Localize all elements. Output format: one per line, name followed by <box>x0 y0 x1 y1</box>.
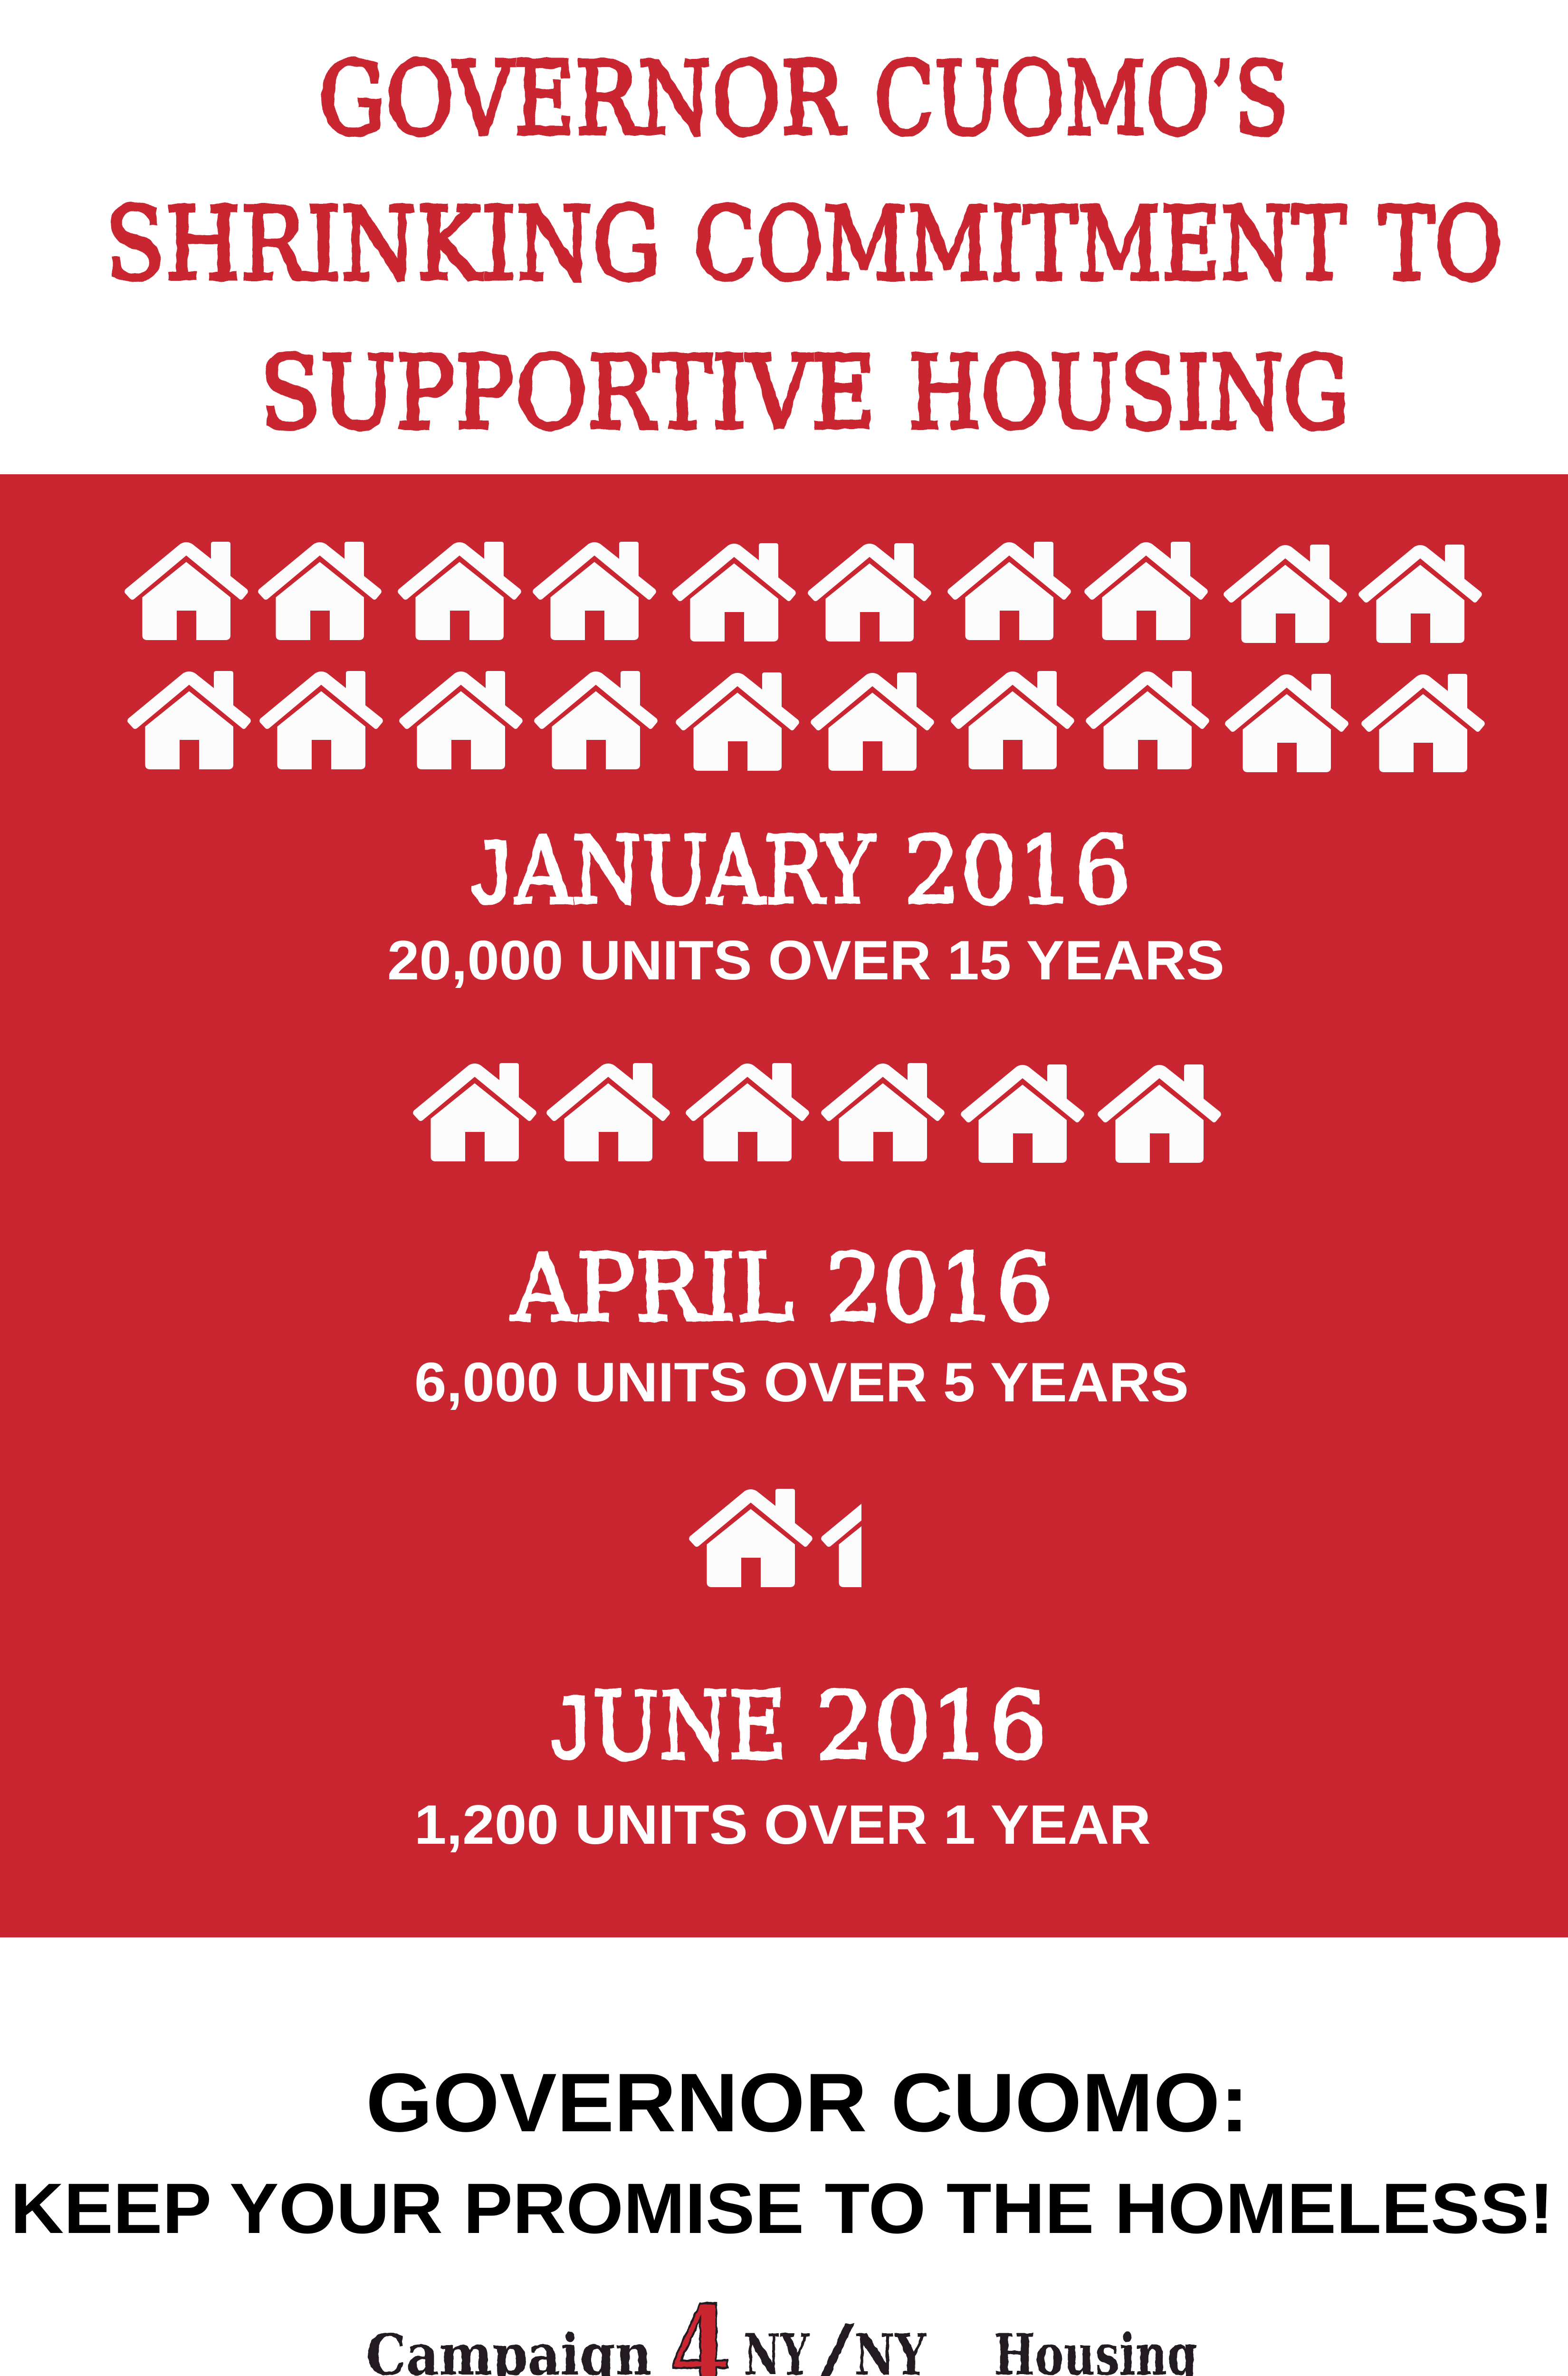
heading: June 2016: JUNE <box>545 1672 786 1786</box>
heading: January 2016: 2016 <box>904 817 1131 925</box>
heading: April 2016: APRIL <box>511 1234 794 1342</box>
logo: Campaign 4 NY/NY Housing <box>366 2280 1197 2376</box>
icon: house <box>689 1489 813 1587</box>
heading: April 2016 <box>511 1234 1053 1342</box>
icon: house <box>546 1063 670 1161</box>
icon: house <box>961 1064 1084 1163</box>
icon: house <box>808 543 931 642</box>
icon: partial house <box>821 1504 861 1587</box>
heading: Governor Cuomo call to action: GOVERNOR CUOMO: <box>366 2057 1249 2149</box>
panel: red timeline background <box>0 474 1568 1937</box>
text: keep your promise: KEEP YOUR PROMISE TO THE HOMELESS! <box>10 2168 1554 2248</box>
icon: house <box>1361 674 1485 772</box>
title: GOVERNOR <box>318 40 846 157</box>
icon: house <box>821 1063 945 1161</box>
icon: house <box>672 543 796 642</box>
title <box>105 40 1502 451</box>
icon: house <box>258 542 382 640</box>
icon: house <box>951 671 1074 769</box>
title: SUPPORTIVE <box>260 334 876 451</box>
heading: June 2016: 2016 <box>816 1672 1047 1781</box>
icon: house <box>1084 542 1208 640</box>
title: TO <box>1379 185 1502 303</box>
icon: house <box>1086 671 1209 769</box>
icon: house <box>947 542 1071 640</box>
heading: April 2016: 2016 <box>825 1234 1053 1342</box>
icon: house <box>1358 545 1482 643</box>
text: 6,000 units over 5 years: 6,000 UNITS OVER 5 YEARS <box>414 1351 1189 1413</box>
icon: house <box>127 671 251 769</box>
icon: house <box>124 542 248 640</box>
icon: house <box>676 672 799 771</box>
icon: house <box>1098 1064 1221 1163</box>
icon row: January 2016 houses, row two <box>127 671 1485 772</box>
icon: house <box>1225 674 1348 772</box>
title: HOUSING <box>908 334 1349 451</box>
icon: house <box>533 542 656 640</box>
icon row: June 2016 houses <box>689 1489 861 1587</box>
icon: house <box>811 672 934 771</box>
heading: June 2016 <box>545 1672 1047 1786</box>
text: 1,200 units over 1 year: 1,200 UNITS OVER 1 YEAR <box>414 1793 1151 1856</box>
icon row: April 2016 houses <box>413 1063 1221 1163</box>
icon: house <box>413 1063 536 1161</box>
icon row: January 2016 houses, row one <box>124 542 1482 643</box>
title: SHRINKING <box>105 185 661 303</box>
icon: house <box>1224 545 1347 643</box>
icon: house <box>259 671 383 769</box>
title: CUOMO’S <box>874 40 1289 157</box>
icon: house <box>686 1063 809 1161</box>
text: 20,000 units over 15 years: 20,000 UNITS OVER 15 YEARS <box>387 929 1224 991</box>
icon: house <box>398 542 521 640</box>
icon: house <box>399 671 523 769</box>
title: COMMITMENT <box>694 185 1347 303</box>
icon: house <box>534 671 658 769</box>
heading: January 2016: JANUARY <box>467 817 875 931</box>
